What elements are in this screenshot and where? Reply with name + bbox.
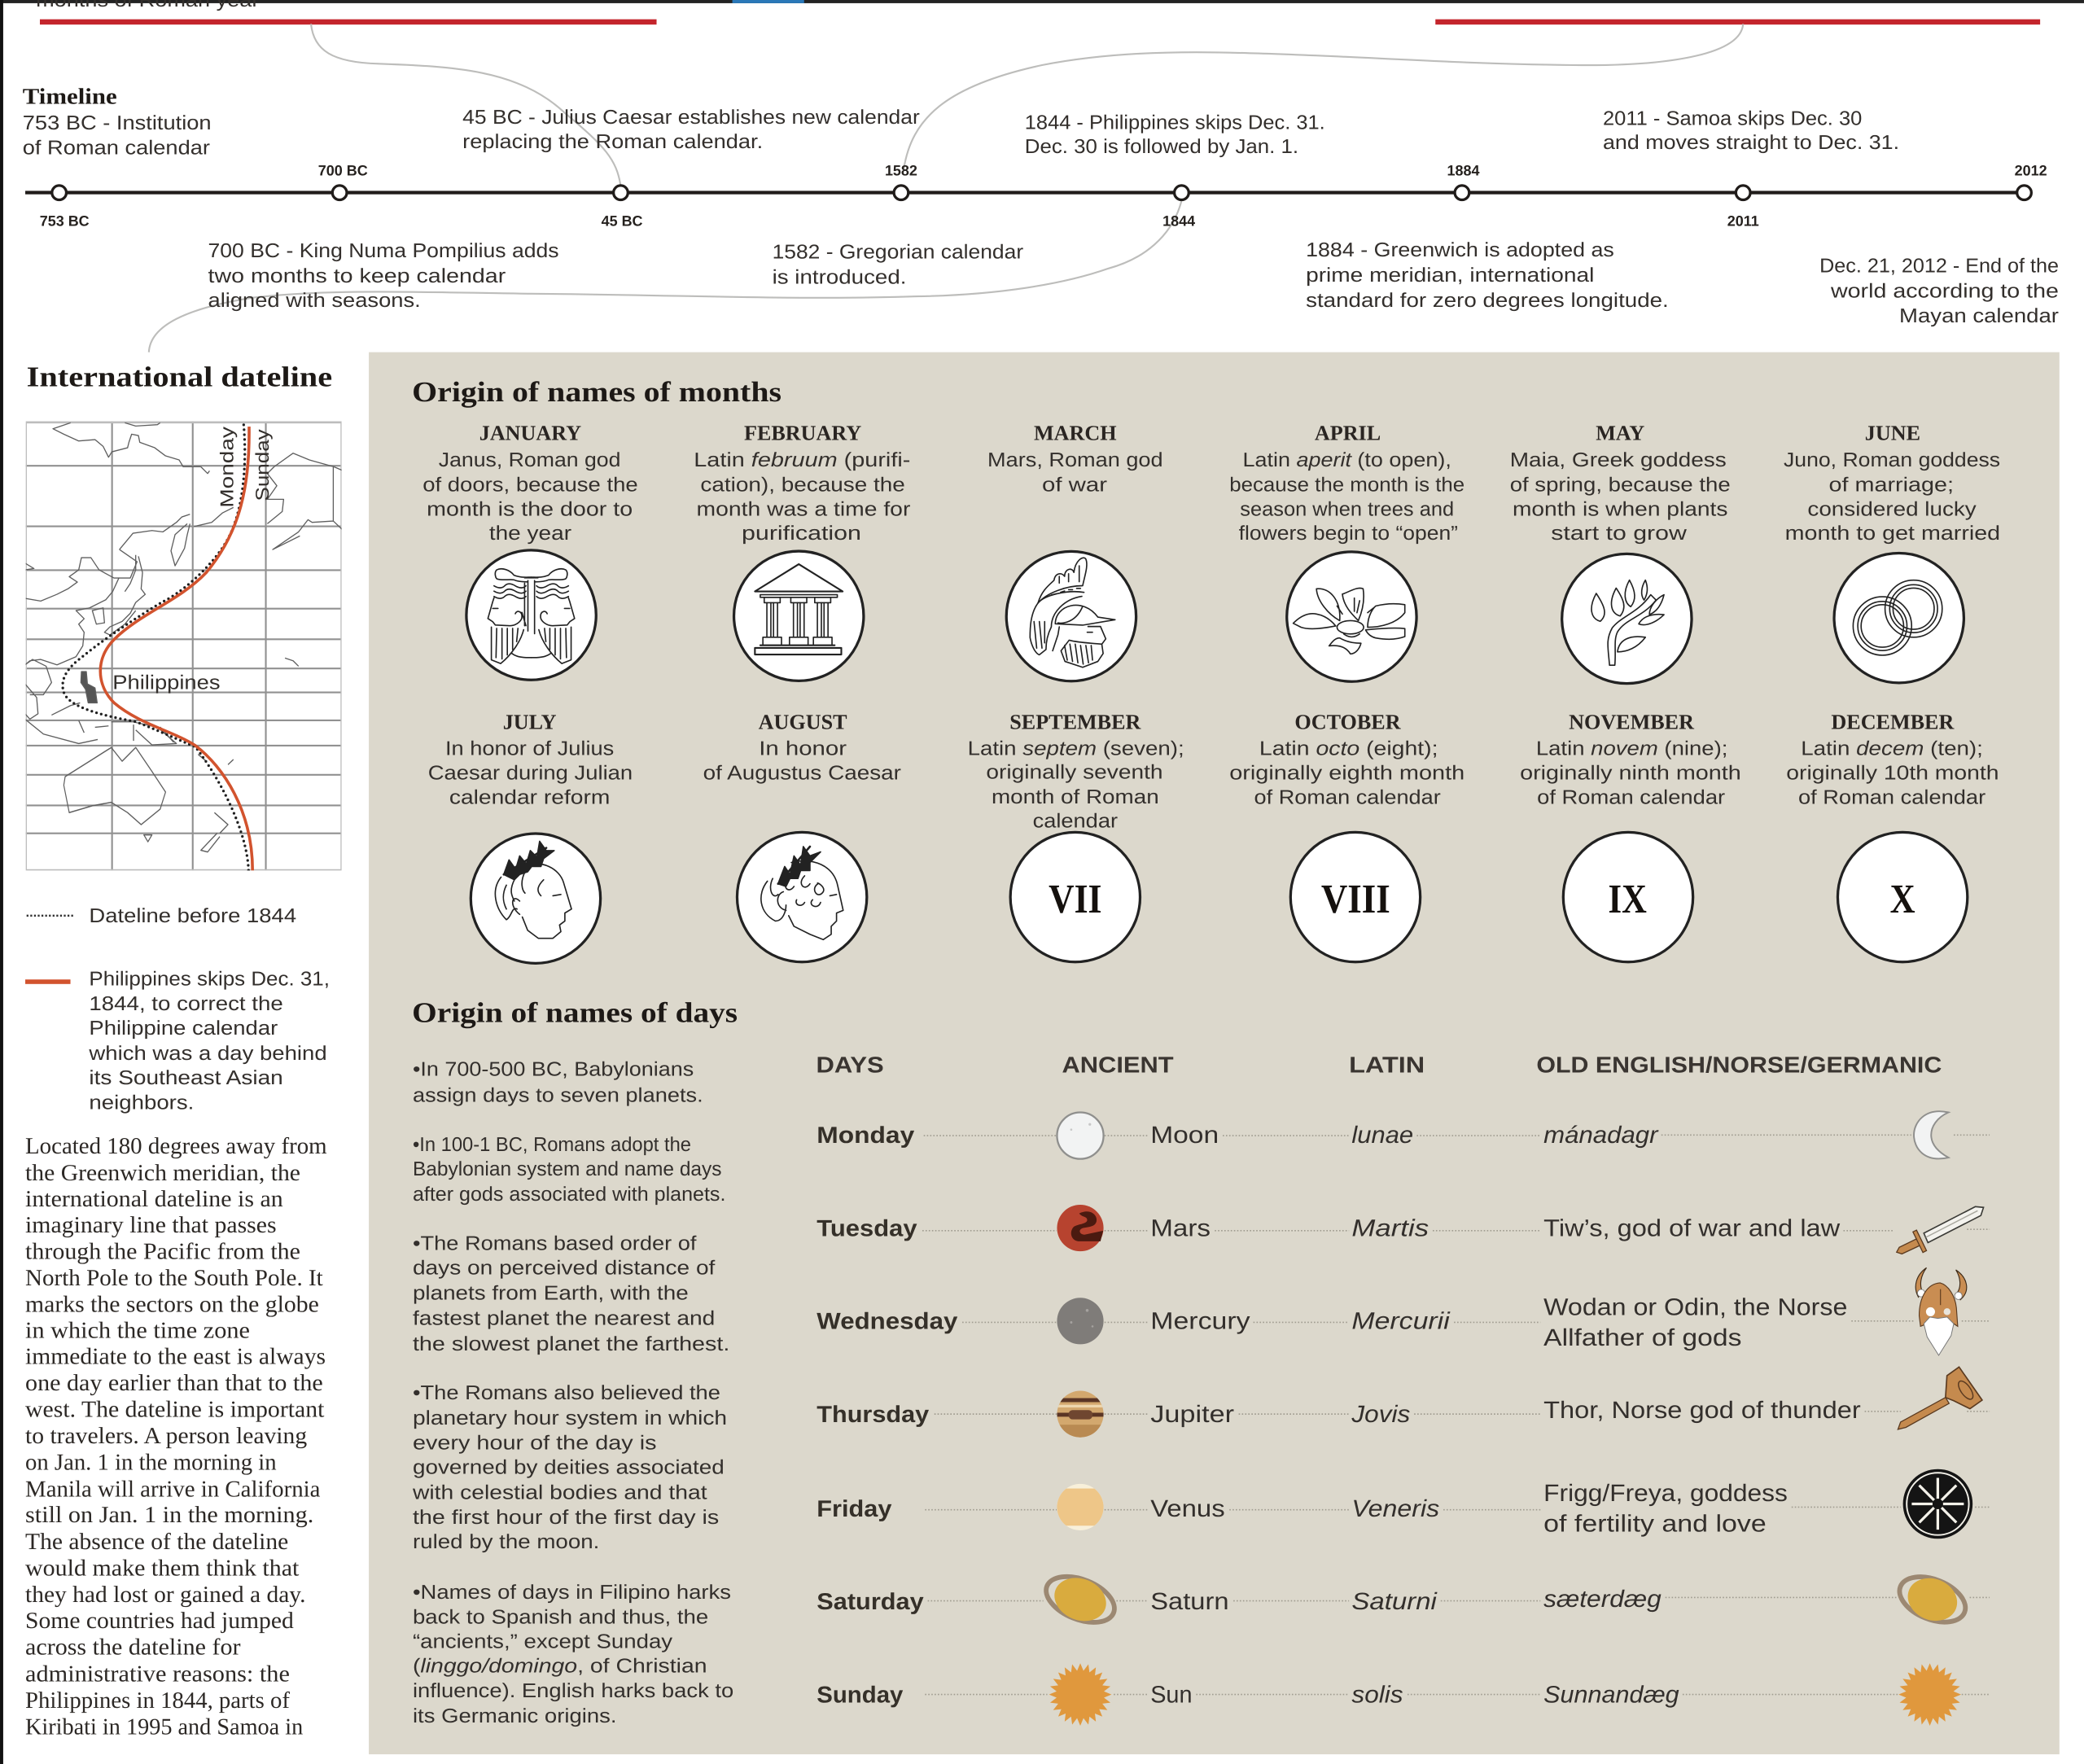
timeline heading: Timeline: [23, 84, 117, 109]
row: Sunday: [817, 1663, 1990, 1726]
row: Wednesday: Mercury: [1150, 1308, 1250, 1334]
row: Monday: mánadagr: [1543, 1122, 1659, 1149]
land outlines north: [25, 422, 344, 745]
month: January: the year: [489, 523, 571, 545]
text: origin of days notes: •The Romans based order of: [413, 1232, 698, 1255]
text: origin of days notes: every hour of the day is: [413, 1432, 657, 1455]
row: Thursday: [817, 1367, 1990, 1438]
row: Monday: lunae: [1351, 1122, 1413, 1149]
month: May: MAY: [1596, 422, 1645, 445]
event: 2011: 2011 - Samoa skips Dec. 30: [1603, 107, 1862, 130]
icon: branch: [1591, 580, 1664, 665]
event: 45 BC: 45 BC - Julius Caesar establishes new calendar: [462, 107, 920, 129]
event: 1884: standard for zero degrees longitude.: [1306, 290, 1669, 313]
article text: to travelers. A person leaving: [25, 1422, 308, 1449]
month: September: month of Roman: [992, 786, 1159, 808]
event: 753 BC: of Roman calendar: [23, 137, 210, 160]
row: Sunday: Sunday: [817, 1681, 904, 1708]
event: 1884: prime meridian, international: [1306, 265, 1594, 287]
icon: Janus: [488, 569, 575, 663]
month: October: of Roman calendar: [1254, 787, 1441, 809]
text: origin of days notes: the first hour of the first day is: [413, 1507, 719, 1529]
month: June: Juno, Roman goddess: [1784, 449, 2000, 472]
row: Tuesday: Tiw’s, god of war and law: [1543, 1215, 1841, 1241]
row: Saturday: sæterdæg: [1543, 1586, 1662, 1612]
panel: international dateline: [25, 361, 344, 1740]
row: Wednesday: Wodan or Odin, the Norse: [1543, 1293, 1847, 1320]
month: June: of marriage;: [1829, 474, 1954, 497]
numeral VIII: VIII: [1321, 875, 1390, 921]
month: April: season when trees and: [1240, 498, 1454, 521]
text: origin of days notes: planets from Earth, with the: [413, 1282, 689, 1305]
row: Saturday: [817, 1567, 1990, 1632]
month: February: Latin februum (purifi-: [694, 449, 910, 472]
month: February: FEBRUARY: [744, 422, 862, 445]
month: December: DECEMBER: [1831, 711, 1955, 734]
row: Tuesday: Tuesday: [817, 1215, 917, 1241]
text: origin of days notes: “ancients,” except Sunday: [413, 1630, 673, 1653]
row: Friday: Veneris: [1351, 1495, 1439, 1521]
text: origin of days notes: [411, 1058, 733, 1727]
event: 753 BC: [23, 112, 212, 160]
article text: one day earlier than that to the: [25, 1369, 323, 1396]
month: June: considered lucky: [1807, 498, 1977, 521]
text: origin of days notes: •The Romans also believed the: [413, 1382, 720, 1405]
month: March: MARCH: [1034, 422, 1117, 445]
month: May: of spring, because the: [1510, 474, 1731, 497]
article text: on Jan. 1 in the morning in: [25, 1449, 277, 1475]
month: December: of Roman calendar: [1798, 787, 1985, 809]
year labels: 2011: [1727, 214, 1759, 230]
row: Tuesday: [817, 1205, 1990, 1254]
article text: Kiribati in 1995 and Samoa in: [25, 1713, 304, 1740]
event: Dec. 21, 2012: [1819, 255, 2059, 327]
year labels: 45 BC: [602, 214, 643, 230]
month: October: originally eighth month: [1229, 762, 1464, 785]
icon: Saturn: [1040, 1567, 1121, 1632]
month: February: cation), because the: [700, 474, 905, 497]
month: September: originally seventh: [986, 762, 1163, 784]
year labels: [40, 164, 2047, 230]
legend: Philippines skips Dec. 31: neighbors.: [89, 1092, 194, 1114]
article text: west. The dateline is important: [25, 1395, 325, 1422]
event: 1582: [773, 241, 1023, 289]
text: origin of days notes: •In 100-1 BC, Romans adopt the: [413, 1134, 691, 1156]
month: March: [987, 422, 1163, 681]
article text: administrative reasons: the: [25, 1660, 290, 1687]
numeral X: X: [1890, 875, 1915, 921]
icon: moon: [1057, 1113, 1104, 1159]
row: Monday: Monday: [817, 1122, 915, 1149]
text: origin of days notes: planetary hour system in which: [413, 1407, 727, 1430]
month: May: month is when plants: [1513, 498, 1727, 521]
land outlines south: [63, 727, 234, 852]
text: origin of days notes: assign days to seven planets.: [413, 1084, 703, 1107]
article text: Manila will arrive in California: [25, 1475, 321, 1502]
map frame: [26, 422, 342, 870]
event: 1582: 1582 - Gregorian calendar: [773, 241, 1023, 264]
month: August: of Augustus Caesar: [703, 762, 901, 785]
month: March: Mars, Roman god: [987, 449, 1163, 472]
event: 2011: and moves straight to Dec. 31.: [1603, 132, 1899, 154]
article text: in which the time zone: [25, 1316, 250, 1343]
event: 45 BC: [462, 107, 920, 154]
text: origin of days notes: with celestial bodies and that: [411, 1482, 708, 1504]
row: Sunday: Sun: [1150, 1681, 1192, 1708]
month: June: [1784, 422, 2000, 683]
year labels: 2012: [2015, 164, 2047, 179]
row: Tuesday: Martis: [1351, 1215, 1429, 1241]
month: January: JANUARY: [479, 422, 582, 445]
article text: would make them think that: [25, 1554, 300, 1581]
legend: Philippines skips Dec. 31: Philippine calendar: [89, 1018, 278, 1040]
text: origin of days notes: back to Spanish and thus, the: [413, 1606, 708, 1629]
row: Friday: of fertility and love: [1543, 1510, 1767, 1537]
article text: [25, 1132, 327, 1740]
event: Dec. 21, 2012: world according to the: [1829, 280, 2059, 303]
month: January: [422, 422, 638, 680]
legend: Philippines skips Dec. 31: Philippines skips Dec. 31,: [89, 968, 330, 991]
row: Friday: Venus: [1150, 1495, 1225, 1521]
event: 1844: Dec. 30 is followed by Jan. 1.: [1025, 136, 1298, 158]
month: December: Latin decem (ten);: [1801, 738, 1983, 760]
month: November: [1520, 711, 1741, 962]
row: Wednesday: Allfather of gods: [1543, 1324, 1741, 1351]
month: July: [428, 711, 633, 963]
article text: Located 180 degrees away from: [25, 1132, 327, 1159]
row: Sunday: solis: [1351, 1681, 1403, 1708]
legend: Philippines skips Dec. 31: which was a day behind: [88, 1043, 327, 1066]
article text: still on Jan. 1 in the morning.: [25, 1501, 313, 1528]
numeral VII: VII: [1049, 875, 1101, 921]
map of dateline: [25, 420, 344, 870]
article text: North Pole to the South Pole. It: [25, 1264, 323, 1290]
icon: rings: [1853, 580, 1942, 655]
article text: they had lost or gained a day.: [25, 1581, 306, 1608]
legend: Philippines skips Dec. 31: [25, 968, 330, 1114]
article text: Some countries had jumped: [25, 1607, 294, 1634]
month: November: originally ninth month: [1520, 762, 1741, 785]
article text: international dateline is an: [25, 1185, 283, 1211]
row: Saturday: Saturn: [1150, 1588, 1229, 1615]
article text: The absence of the dateline: [25, 1528, 289, 1554]
event: 45 BC: replacing the Roman calendar.: [462, 131, 763, 154]
timeline axis: [25, 190, 2025, 195]
month: January: Janus, Roman god: [439, 449, 620, 472]
legend: dateline before 1844: Dateline before 1844: [89, 905, 296, 928]
table headers: OLD ENGLISH/NORSE/GERMANIC: [1536, 1053, 1942, 1078]
event: 753 BC: 753 BC - Institution: [23, 112, 212, 135]
article text: across the dateline for: [25, 1634, 241, 1660]
month: August: [703, 711, 901, 962]
red rule right: [1435, 20, 2040, 24]
panel: origin of names: [369, 352, 2060, 1754]
icon: Mars helmet: [1030, 558, 1115, 668]
row: Monday: Moon: [1150, 1122, 1219, 1149]
text: origin of days notes: •Names of days in Filipino harks: [413, 1582, 731, 1604]
heading: origin of names of days: Origin of names of days: [412, 996, 738, 1029]
month: February: [694, 422, 910, 681]
row: Wednesday: [817, 1267, 1990, 1355]
event: 700 BC: 700 BC - King Numa Pompilius adds: [208, 240, 559, 262]
year labels: 1844: [1162, 214, 1197, 230]
connector curves: [149, 24, 1743, 352]
icon: Augustus: [761, 847, 843, 939]
month: November: NOVEMBER: [1569, 711, 1695, 734]
icon: Saturn small: [1893, 1568, 1972, 1631]
text: origin of days notes: •In 700-500 BC, Babylonians: [413, 1058, 694, 1081]
event: 1582: is introduced.: [773, 266, 906, 289]
month: July: In honor of Julius: [445, 738, 614, 760]
row: Thursday: Jupiter: [1150, 1401, 1234, 1427]
icon: Mercury: [1057, 1298, 1104, 1344]
text: origin of days notes: (linggo/domingo , of Christian: [413, 1655, 707, 1678]
event: 2011: [1603, 107, 1899, 154]
event: 1844: 1844 - Philippines skips Dec. 31.: [1025, 112, 1325, 134]
event: 1884: 1884 - Greenwich is adopted as: [1306, 239, 1614, 262]
month: April: Latin aperit (to open),: [1243, 449, 1451, 472]
month: May: [1510, 422, 1731, 684]
icon: Mars: [1057, 1205, 1104, 1251]
icon: Sun: [1049, 1663, 1111, 1726]
event: 1884: [1306, 239, 1669, 313]
year labels: 753 BC: [40, 214, 90, 230]
text: origin of days notes: the slowest planet the farthest.: [413, 1333, 729, 1355]
legend: Philippines skips Dec. 31: its Southeast Asian: [89, 1067, 283, 1090]
row: Friday: [817, 1469, 1990, 1539]
table headers: DAYS: [816, 1053, 884, 1078]
month: July: calendar reform: [449, 787, 610, 809]
month: January: month is the door to: [427, 498, 633, 521]
month: December: originally 10th month: [1786, 762, 1999, 785]
month: September: [968, 711, 1184, 962]
month: August: AUGUST: [759, 711, 847, 734]
text: origin of days notes: days on perceived distance of: [413, 1257, 716, 1280]
timeline markers: [52, 186, 2031, 200]
month: August: In honor: [759, 738, 847, 760]
row: Friday: Friday: [817, 1495, 892, 1521]
month: March: of war: [1042, 474, 1107, 497]
event: Dec. 21, 2012: Mayan calendar: [1899, 305, 2059, 327]
row: Friday: Frigg/Freya, goddess: [1543, 1480, 1788, 1507]
icon: Venus: [1057, 1483, 1105, 1531]
month: November: of Roman calendar: [1537, 787, 1725, 809]
article text: through the Pacific from the: [25, 1237, 300, 1264]
event: Dec. 21, 2012: Dec. 21, 2012 - End of the: [1819, 255, 2059, 278]
icon: Julius Caesar: [495, 841, 571, 939]
text: origin of days notes: fastest planet the nearest and: [413, 1308, 715, 1330]
month: April: flowers begin to “open”: [1239, 523, 1458, 545]
month: June: JUNE: [1865, 422, 1920, 445]
map label: Philippines: Philippines: [112, 672, 221, 694]
icon: Sun small: [1898, 1663, 1961, 1726]
month: April: APRIL: [1315, 422, 1381, 445]
month: April: because the month is the: [1229, 474, 1464, 497]
row: Saturday: Saturni: [1351, 1588, 1438, 1615]
text: origin of days notes: after gods associated with planets.: [413, 1184, 725, 1206]
text: origin of days notes: Babylonian system and name days: [413, 1158, 722, 1181]
table headers: LATIN: [1349, 1053, 1425, 1078]
year labels: 1582: [885, 164, 917, 179]
current dateline (red): [100, 427, 252, 870]
heading: international dateline: International dateline: [27, 361, 332, 392]
event: 700 BC: [208, 240, 559, 313]
month: September: SEPTEMBER: [1009, 711, 1141, 734]
icon: rune shield: [1903, 1469, 1972, 1539]
row: Monday: [817, 1111, 1990, 1159]
year labels: 1884: [1447, 164, 1481, 179]
article text: marks the sectors on the globe: [25, 1290, 319, 1317]
icon: crescent moon: [1914, 1111, 1948, 1158]
map label: Monday: Monday: [216, 427, 238, 508]
row: Thursday: Jovis: [1351, 1401, 1410, 1427]
article text: Philippines in 1844, parts of: [25, 1687, 290, 1713]
row: Tuesday: Mars: [1150, 1215, 1211, 1241]
icon: Jupiter: [1057, 1390, 1105, 1438]
text: origin of days notes: ruled by the moon.: [413, 1531, 599, 1554]
row: Saturday: Saturday: [817, 1588, 924, 1615]
dateline before 1844 (dotted): [63, 420, 248, 870]
event: 1844: [1025, 112, 1325, 158]
table of days: [816, 1053, 1990, 1726]
month: December: [1786, 711, 1999, 962]
month: May: start to grow: [1551, 523, 1687, 545]
icon: viking helmet: [1915, 1267, 1967, 1355]
article text: the Greenwich meridian, the: [25, 1159, 300, 1185]
map label: Sunday: Sunday: [252, 429, 273, 501]
text: origin of days notes: governed by deities associated: [413, 1456, 725, 1479]
year labels: 700 BC: [318, 164, 368, 179]
icon: sword: [1897, 1206, 1984, 1254]
icon: flower: [1294, 588, 1405, 654]
month: July: Caesar during Julian: [428, 762, 633, 785]
month: April: [1229, 422, 1464, 681]
row: Thursday: Thursday: [817, 1401, 930, 1427]
article text: immediate to the east is always: [25, 1343, 326, 1369]
text: origin of days notes: influence). English harks back to: [413, 1680, 733, 1702]
month: October: Latin octo (eight);: [1259, 738, 1438, 760]
numeral IX: IX: [1609, 875, 1648, 921]
icon: temple: [755, 564, 843, 654]
row: Wednesday: Mercurii: [1351, 1308, 1451, 1334]
row: Sunday: Sunnandæg: [1543, 1681, 1679, 1708]
legend: Philippines skips Dec. 31: 1844, to correct the: [89, 993, 283, 1015]
month: September: Latin septem (seven);: [968, 738, 1184, 760]
month: May: Maia, Greek goddess: [1510, 449, 1727, 472]
timeline: [23, 84, 2059, 327]
event: 700 BC: two months to keep calendar: [208, 265, 506, 287]
heading: origin of names of months: Origin of names of months: [412, 376, 782, 408]
month: October: OCTOBER: [1294, 711, 1401, 734]
text: origin of days notes: its Germanic origins.: [413, 1705, 617, 1727]
event: 700 BC: aligned with seasons.: [208, 290, 421, 313]
month: June: month to get married: [1785, 523, 2000, 545]
month: November: Latin novem (nine);: [1536, 738, 1727, 760]
table headers: ANCIENT: [1062, 1053, 1175, 1078]
month: October: [1229, 711, 1464, 962]
month: July: JULY: [503, 711, 557, 734]
month: January: of doors, because the: [422, 474, 638, 497]
month: February: purification: [742, 523, 861, 545]
row: Wednesday: Wednesday: [817, 1308, 958, 1334]
table headers: [816, 1053, 1942, 1078]
row: Thursday: Thor, Norse god of thunder: [1543, 1397, 1861, 1424]
red rule left: [40, 20, 657, 24]
month: February: month was a time for: [697, 498, 910, 521]
article text: imaginary line that passes: [25, 1211, 277, 1238]
icon: hammer: [1898, 1367, 1982, 1429]
month: September: calendar: [1033, 810, 1118, 833]
